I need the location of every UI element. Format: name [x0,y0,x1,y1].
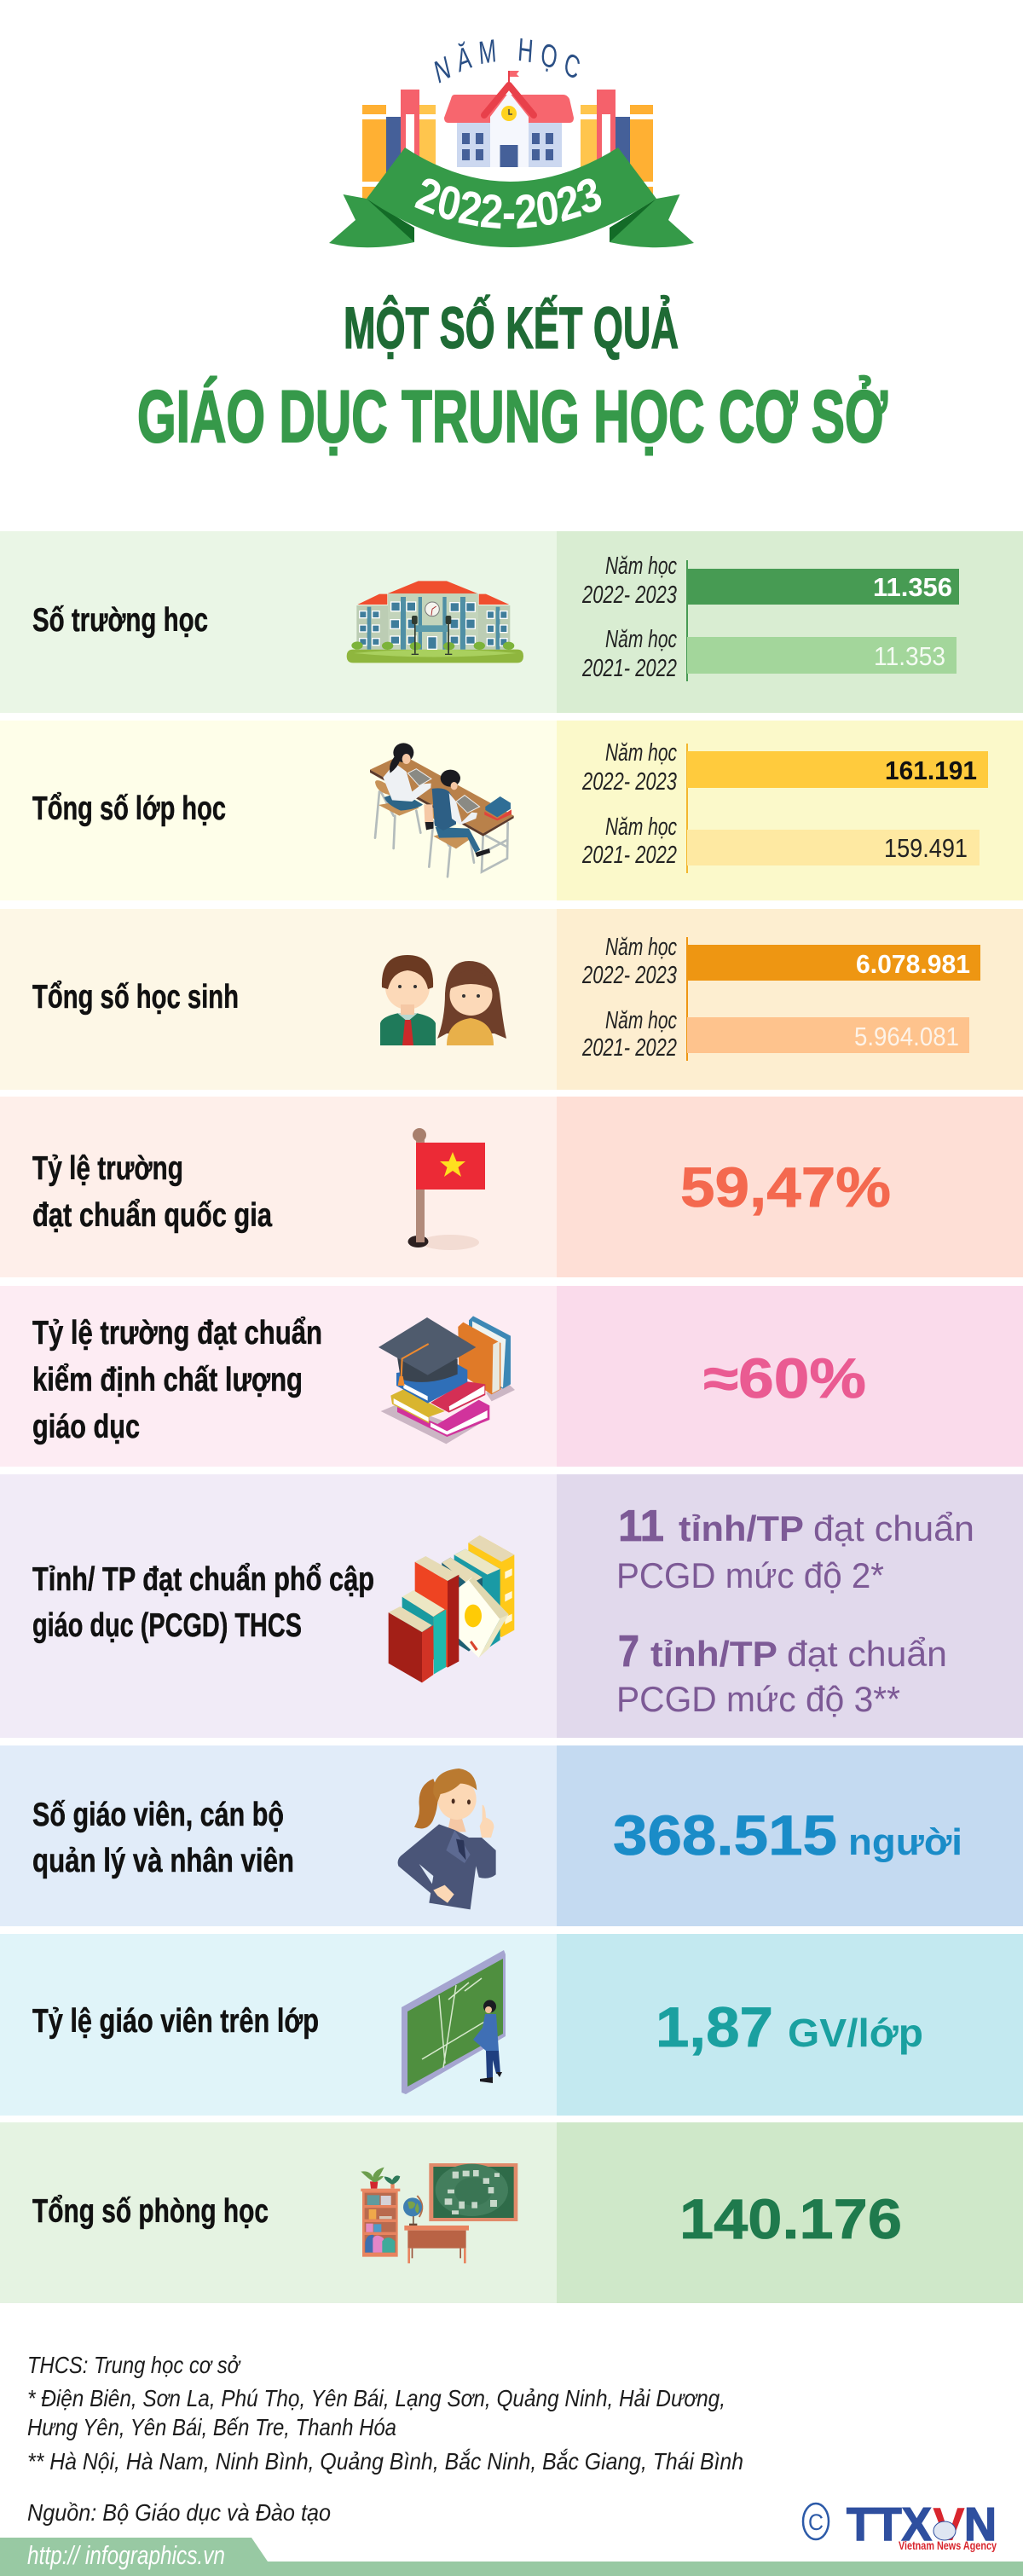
panel: teacher per class ratio [0,1934,1023,2116]
logo: TTXVN: C [808,2509,824,2535]
panel: total classes [0,721,1023,900]
value: level 3: 7 [618,1627,639,1676]
label: Số giáo viên, cán bộ [32,1797,284,1833]
footnotes [27,2352,743,2475]
value: level 2 [616,1502,974,1595]
heading: 2022-2023 on ribbon [414,179,602,229]
label: Tổng số phòng học [32,2193,269,2230]
bar 2021-2022 [687,1017,969,1053]
footer band with website: http:// infographics.vn [27,2540,225,2570]
value: ≈60% [703,1346,866,1410]
value: level 2: đạt chuẩn [813,1508,974,1548]
icon: teacher [398,1768,496,1909]
panel: quality accreditation [0,1286,1023,1467]
logo: TTXVN: V [933,2498,965,2550]
footer band with website [0,2538,1023,2576]
bar chart: classes [581,739,988,873]
panel: teachers and staff: người [848,1821,962,1863]
label: Tỷ lệ giáo viên trên lớp [32,2003,319,2040]
bar chart: students: Năm học [605,1007,677,1034]
bar chart: classes: Năm học [605,739,677,767]
logo: TTXVN: Vietnam News Agency [899,2538,997,2552]
icon: students at desk [370,743,514,877]
panel: number of schools [0,531,1023,713]
value: level 3: PCGD mức độ 3** [616,1679,900,1719]
icon: left books [362,90,436,207]
footnotes: Hưng Yên, Yên Bái, Bến Tre, Thanh Hóa [27,2414,396,2440]
bar chart: students: 5.964.081 [854,1022,959,1051]
logo: TTXVN: TTX [847,2498,932,2550]
bar chart: students: 2021- 2022 [581,1034,677,1062]
bar chart: students: 6.078.981 [856,949,970,979]
label: Số trường học [32,602,208,639]
panel: teachers and staff: quản lý và nhân viên [32,1843,294,1879]
bar chart: students: Năm học [605,934,677,961]
bar chart: classes: Năm học [605,813,677,841]
panel: teachers and staff [0,1745,1023,1926]
panel: universal education provinces: giáo dục (PCGD) THCS [32,1607,302,1644]
footnotes: THCS: Trung học cơ sở [27,2352,241,2378]
value: level 3: đạt chuẩn [787,1634,947,1674]
panel: teacher per class ratio: GV/lớp [788,2011,923,2055]
title line 1: MỘT SỐ KẾT QUẢ [344,295,679,361]
value: level 3 [616,1627,947,1719]
footnotes: ** Hà Nội, Hà Nam, Ninh Bình, Quảng Bình, Bắc Ninh, Bắc Giang, Thái Bình [27,2448,743,2475]
label: Tỷ lệ trường đạt chuẩn [32,1315,322,1352]
value: level 2: 11 [618,1502,664,1551]
icon: Vietnam flag [407,1128,485,1250]
value: level 3: tỉnh/TP [650,1634,777,1674]
value: level 2: tỉnh/TP [679,1508,804,1548]
bar chart: schools [581,553,959,682]
label: Tổng số lớp học [32,790,226,827]
label: Tổng số học sinh [32,979,239,1016]
panel: national standard schools: đạt chuẩn quốc gia [32,1197,272,1234]
icon: classroom [361,2163,517,2263]
logo: TTXVN [803,2498,997,2552]
heading: 2022-2023 on ribbon: 2022-2023 [414,179,602,229]
icon: teacher at blackboard [402,1950,506,2094]
icon: two students [380,955,506,1045]
icon: books and graduation cap [379,1316,515,1444]
value: 59,47% [680,1155,891,1219]
icon: green ribbon [329,148,694,247]
bar 2022-2023 [687,945,980,981]
label: Tỉnh/ TP đạt chuẩn phổ cập [32,1561,374,1598]
value: 140.176 [679,2187,902,2250]
heading: Năm học arc: NĂM HỌC [435,38,580,84]
panel: quality accreditation: giáo dục [32,1409,140,1445]
icon: row of books [389,1536,514,1682]
panel: universal education provinces [0,1474,1023,1738]
bar chart: students: 2022- 2023 [581,962,677,989]
bar chart: students [581,934,980,1062]
bar 2022-2023 [687,751,988,788]
label: Tỷ lệ trường [32,1150,183,1187]
header emblem: school year badge [329,38,694,247]
source: Nguồn: Bộ Giáo dục và Đào tạo [27,2499,331,2526]
heading: Năm học arc [435,38,580,84]
bar chart: classes: 2022- 2023 [581,768,677,796]
bar chart: schools: 11.353 [874,641,945,671]
icon: school house [444,71,574,167]
panel: quality accreditation: kiểm định chất lượng [32,1362,303,1398]
bar chart: schools: 2021- 2022 [581,655,677,682]
icon: right books [581,90,653,207]
panel: national standard schools [0,1097,1023,1277]
bar chart: schools: 2022- 2023 [581,582,677,609]
bar chart: classes: 2021- 2022 [581,842,677,869]
value: 1,87 [656,1995,773,2058]
value: 368.515 [613,1803,837,1867]
value: level 2: PCGD mức độ 2* [616,1555,884,1595]
panel: total classrooms [0,2122,1023,2303]
bar chart: schools: Năm học [605,553,677,580]
title [137,295,887,458]
bar chart: classes: 161.191 [885,755,977,785]
icon: school building [347,581,523,663]
bar 2021-2022 [687,637,957,674]
bar 2022-2023 [687,569,959,605]
bar 2021-2022 [687,830,980,865]
bar chart: schools: 11.356 [873,572,952,602]
bar chart: classes: 159.491 [884,833,968,863]
logo: TTXVN: N [964,2498,997,2550]
panel: total students [0,909,1023,1090]
bar chart: schools: Năm học [605,626,677,653]
footnotes: * Điện Biên, Sơn La, Phú Thọ, Yên Bái, Lạng Sơn, Quảng Ninh, Hải Dương, [27,2385,725,2411]
